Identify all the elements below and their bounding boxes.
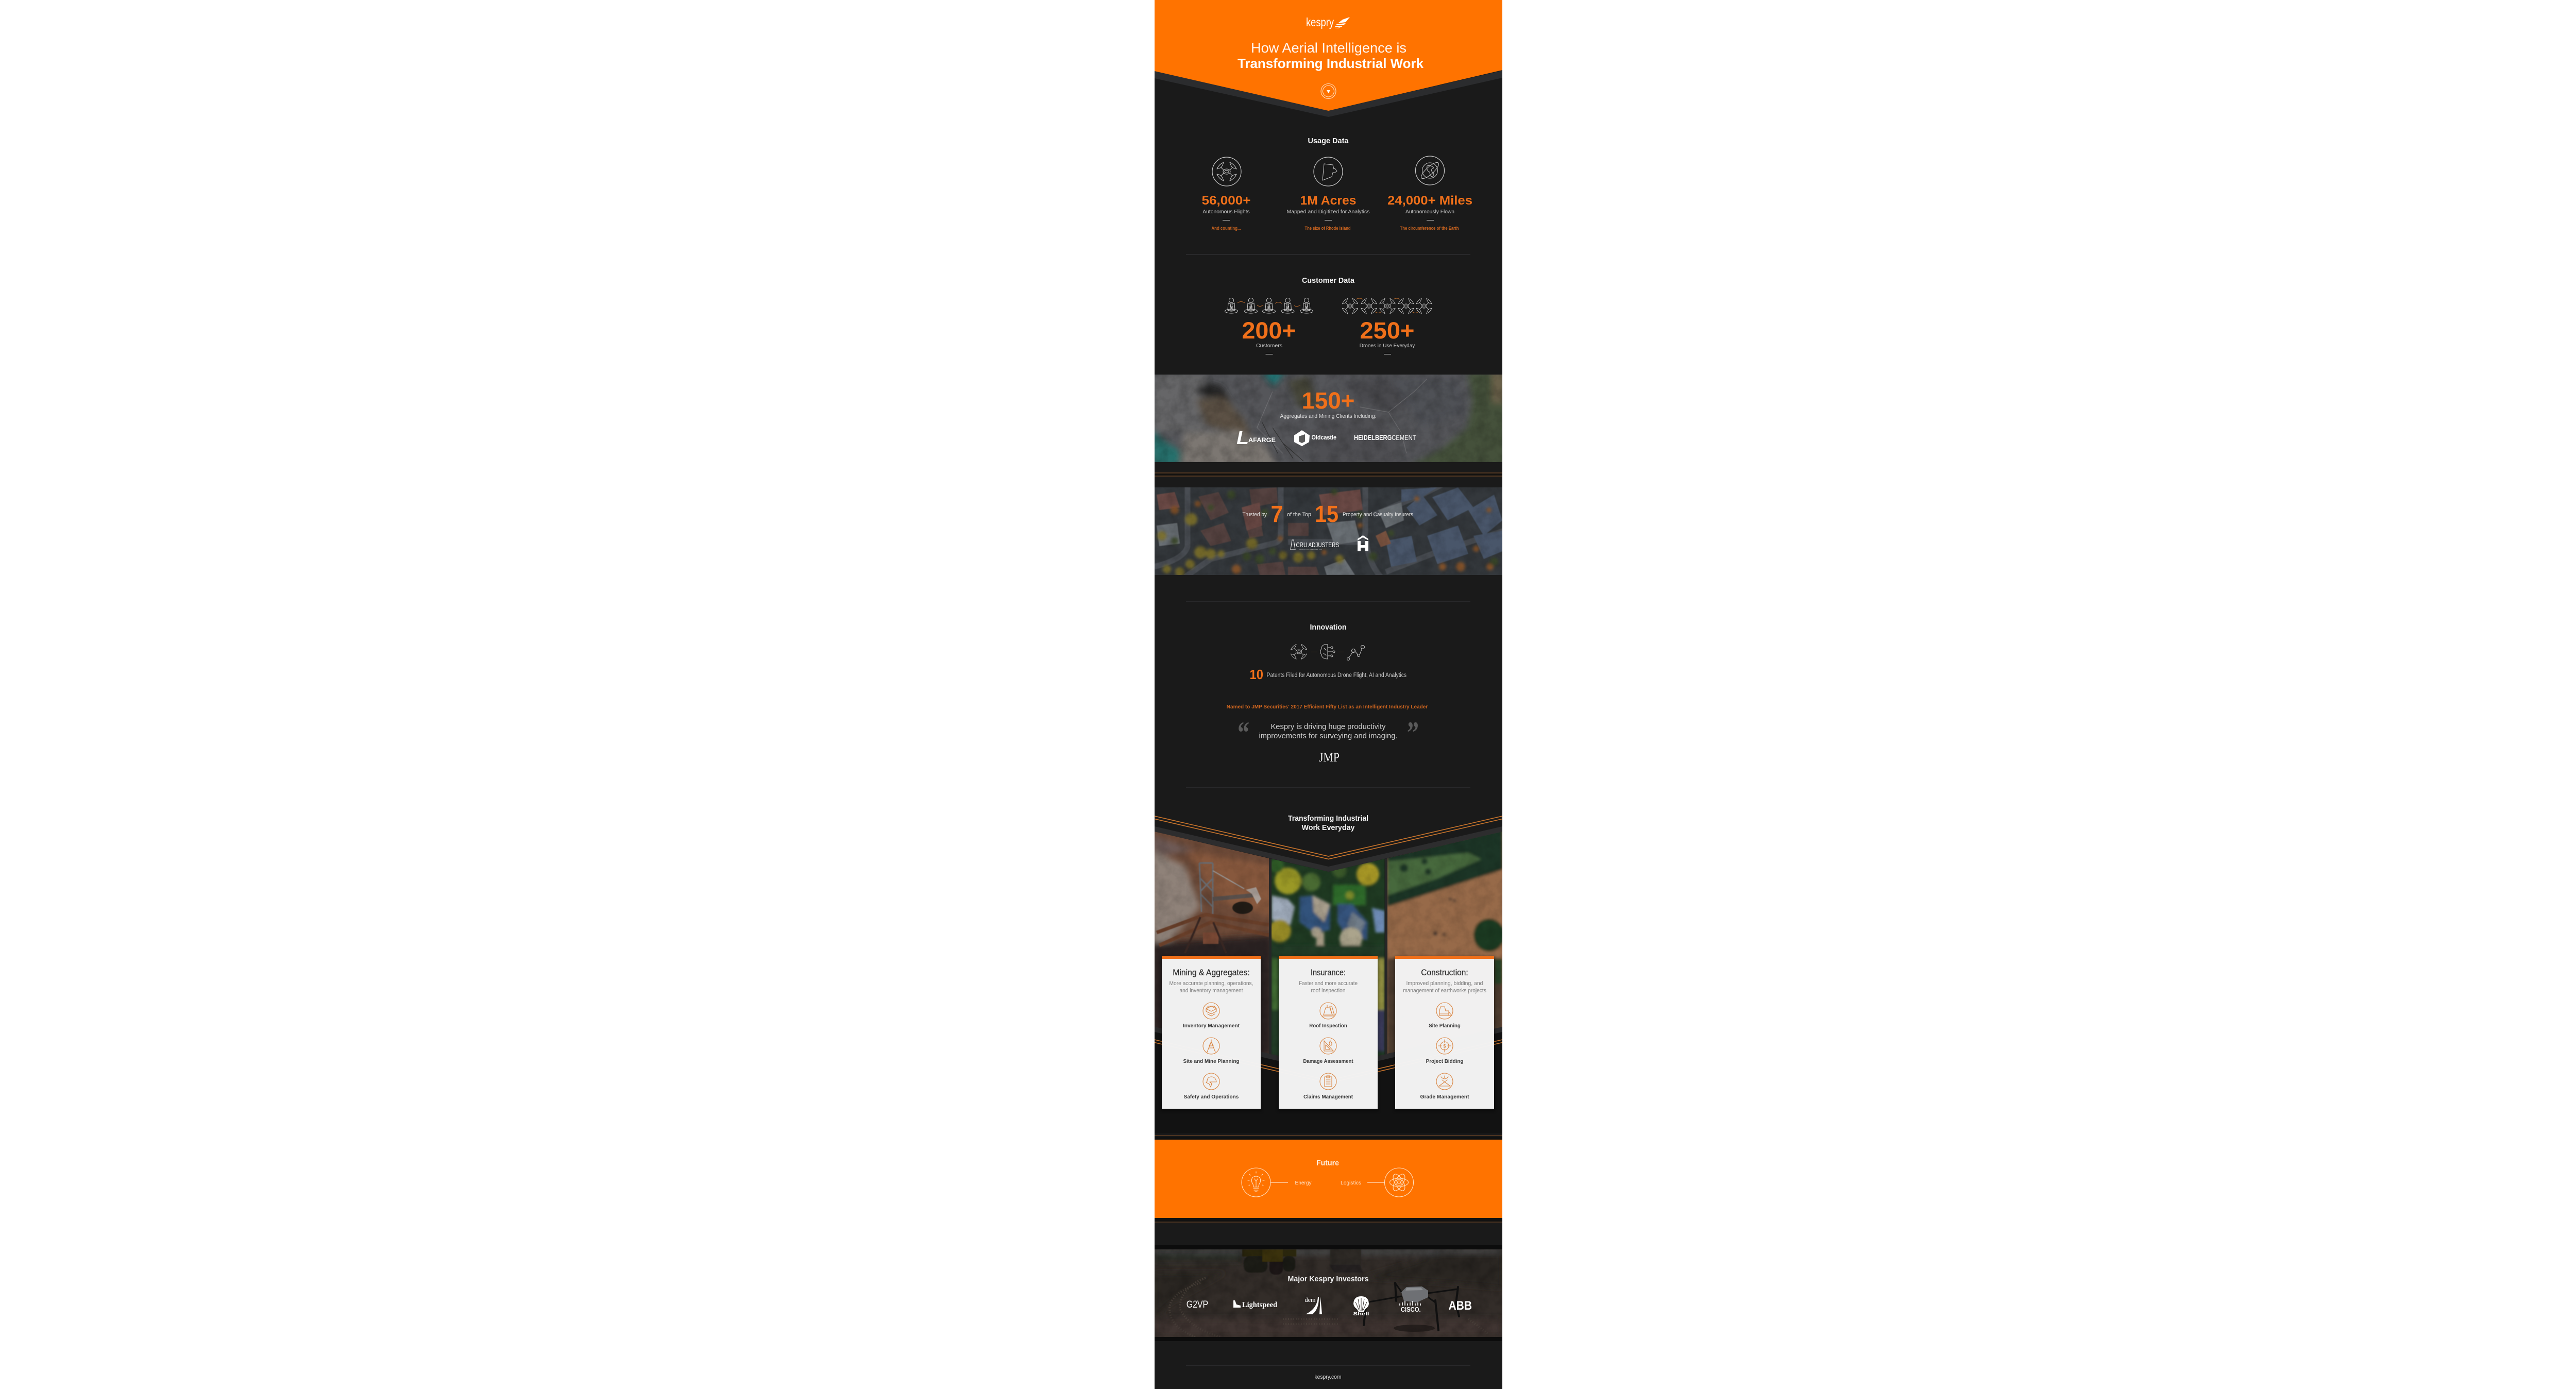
logo: g2vp: G2VP	[1187, 1299, 1208, 1310]
logo: cisco	[1400, 1301, 1421, 1313]
chevron shadow band	[1155, 71, 1502, 117]
heading: Work Everyday	[1301, 823, 1355, 832]
orange header shape	[1155, 0, 1502, 111]
section: innovation	[1227, 623, 1428, 765]
card: construction: Site Planning	[1429, 1023, 1461, 1029]
patents stat: 10	[1250, 667, 1263, 682]
heading: Major Kespry Investors	[1288, 1275, 1368, 1283]
stat: flights: Autonomous Flights	[1202, 209, 1250, 215]
quote: Kespry is driving huge productivity	[1270, 722, 1386, 731]
card: construction: management of earthworks projects	[1403, 988, 1486, 994]
card: insurance: Roof Inspection	[1309, 1023, 1347, 1029]
panel: aggregates and mining	[1155, 375, 1502, 462]
card: mining and aggregates: Site and Mine Planning	[1183, 1058, 1240, 1064]
stat: 150+: 150+	[1301, 387, 1355, 414]
item: energy	[1242, 1168, 1312, 1197]
stat: 200+ customers: 200+	[1242, 317, 1296, 344]
item: logistics	[1341, 1168, 1414, 1197]
photo: construction site	[1387, 829, 1504, 1056]
orange band	[1155, 1140, 1502, 1218]
icons: drone, brain, analytics	[1291, 645, 1364, 660]
stat: miles: 24,000+ Miles	[1387, 194, 1472, 208]
icon: hard hat	[1203, 1073, 1219, 1090]
icon: compass	[1203, 1038, 1219, 1054]
top chevron orange lines	[1155, 816, 1502, 859]
caption: Aggregates and Mining Clients Including:	[1280, 413, 1377, 419]
title: Transforming Industrial Work	[1238, 56, 1424, 71]
logo: cru adjusters: catastrophe response unit	[1299, 548, 1322, 550]
trusted by row	[1243, 501, 1413, 527]
stat: miles: Autonomously Flown	[1405, 209, 1454, 215]
stat: 200+ customers	[1242, 317, 1296, 354]
stat: 250+ drones	[1360, 317, 1415, 354]
page background panel	[1155, 0, 1502, 1389]
stat: miles: The circumference of the Earth	[1400, 226, 1459, 231]
photo: quarry	[1155, 375, 1502, 462]
patents stat: Patents Filed for Autonomous Drone Flight, AI and Analytics	[1266, 672, 1406, 679]
section: customer data	[1225, 276, 1432, 354]
panel: future	[1155, 1136, 1502, 1222]
logo: shell: Shell	[1353, 1311, 1369, 1317]
logo: h house	[1358, 535, 1368, 551]
title: How Aerial Intelligence is	[1251, 40, 1406, 56]
logo: abb: ABB	[1449, 1299, 1472, 1313]
card: insurance: Insurance:	[1311, 968, 1346, 977]
item: energy: Energy	[1295, 1180, 1312, 1186]
stat: flights: And counting...	[1212, 226, 1241, 231]
stat: flights: 56,000+	[1201, 194, 1251, 208]
column gaps	[1269, 858, 1387, 1055]
section: usage data	[1201, 137, 1472, 231]
bottom chevron	[1155, 1027, 1502, 1133]
logo: cisco: CISCO.	[1401, 1306, 1421, 1313]
icon: scroll down	[1321, 83, 1336, 99]
icon: drone	[1212, 157, 1241, 186]
panel: insurers	[1154, 484, 1504, 577]
logo: oldcastle	[1294, 430, 1336, 446]
stat: acres: 1M Acres	[1300, 194, 1356, 208]
heading	[1288, 814, 1368, 832]
stat: miles	[1387, 156, 1472, 231]
icon: roof inspection	[1320, 1003, 1336, 1019]
decorative band edges	[1155, 1136, 1502, 1222]
header banner	[1155, 0, 1502, 117]
icons: customers row	[1225, 298, 1313, 313]
card: mining and aggregates: Inventory Management	[1183, 1023, 1240, 1029]
icon: rhode island	[1314, 157, 1343, 186]
heading: Usage Data	[1308, 137, 1349, 145]
logo: shell	[1353, 1296, 1369, 1317]
heading: Customer Data	[1302, 276, 1355, 285]
card: insurance	[1279, 956, 1378, 1109]
icon: opening quote mark: “	[1238, 716, 1249, 750]
logo: lafarge: AFARGE	[1248, 436, 1276, 444]
card: construction	[1395, 956, 1494, 1109]
card: construction: Project Bidding	[1426, 1058, 1463, 1064]
icon: damage assessment	[1320, 1038, 1336, 1054]
stat: 250+ drones: Drones in Use Everyday	[1360, 343, 1415, 349]
card: mining and aggregates: Safety and Operations	[1184, 1094, 1239, 1100]
heading: Transforming Industrial	[1288, 814, 1368, 823]
card: mining and aggregates: Mining & Aggregates:	[1173, 968, 1250, 977]
top chevron band	[1155, 826, 1502, 872]
card shadows	[1161, 956, 1495, 1111]
stat: 200+ customers: Customers	[1256, 343, 1282, 349]
card: construction: $	[1443, 1044, 1446, 1049]
quote	[1238, 716, 1419, 750]
patents stat	[1250, 667, 1406, 682]
icon: claims clipboard	[1320, 1073, 1336, 1090]
title	[1238, 40, 1424, 71]
quote: improvements for surveying and imaging.	[1259, 732, 1397, 740]
heading: Innovation	[1310, 623, 1347, 632]
icon: inventory	[1203, 1003, 1219, 1019]
card: construction: Construction:	[1421, 968, 1468, 977]
illustration: drone	[1364, 1283, 1459, 1332]
icon: bulldozer	[1436, 1003, 1453, 1019]
stat: flights	[1201, 157, 1251, 231]
logo: cru adjusters: CRU ADJUSTERS	[1296, 541, 1339, 549]
photo: suburb	[1154, 484, 1504, 577]
logo: kespry: kespry	[1306, 15, 1334, 29]
icon: light bulb	[1242, 1168, 1270, 1197]
icons: drones row	[1342, 298, 1432, 314]
heading: Future	[1316, 1159, 1339, 1167]
stat: acres	[1287, 157, 1369, 231]
trusted by row: Trusted by	[1243, 512, 1267, 518]
logo: dfj dem: dem	[1304, 1296, 1316, 1303]
icon: project bidding target	[1436, 1038, 1453, 1054]
logo: lafarge: L	[1236, 427, 1249, 448]
trusted by row: 15	[1315, 501, 1338, 527]
photo: construction ground with drone	[1155, 1249, 1502, 1337]
trusted by row: 7	[1270, 501, 1283, 527]
item: logistics: Logistics	[1341, 1180, 1361, 1186]
icon: grade management	[1436, 1073, 1453, 1090]
card: insurance: Claims Management	[1303, 1094, 1353, 1100]
logo: lafarge	[1236, 427, 1276, 448]
card: construction: Improved planning, bidding, and	[1406, 980, 1483, 987]
photo: mining excavator	[1151, 829, 1273, 1056]
logo: cru adjusters	[1291, 540, 1339, 550]
card: mining and aggregates: More accurate planning, operations,	[1170, 980, 1253, 987]
logo: heidelbergcement: HEIDELBERGCEMENT	[1354, 434, 1416, 442]
logo: dfj dem	[1304, 1296, 1322, 1314]
icon: wing	[1333, 17, 1350, 28]
card: mining and aggregates: and inventory management	[1180, 988, 1243, 994]
card: insurance: Faster and more accurate	[1299, 980, 1358, 987]
card: mining and aggregates	[1162, 956, 1261, 1109]
icon: globe	[1416, 156, 1445, 185]
panel: investors	[1155, 1245, 1502, 1341]
card: construction: Grade Management	[1420, 1094, 1469, 1100]
trusted by row: Property and Casualty Insurers	[1343, 512, 1413, 518]
footer link: kespry.com	[1315, 1374, 1342, 1380]
section: industries	[1151, 814, 1504, 1133]
stat: acres: The size of Rhode Island	[1304, 226, 1351, 231]
card: insurance: Damage Assessment	[1303, 1058, 1353, 1064]
recognition line: Named to JMP Securities' 2017 Efficient Fifty List as an Intelligent Industry Leader	[1227, 704, 1428, 710]
decorative stripes	[1155, 473, 1502, 476]
photo: houses	[1272, 859, 1385, 1056]
trusted by row: of the Top	[1287, 512, 1311, 518]
icon: closing quote mark: ”	[1407, 716, 1419, 750]
logo: jmp: JMP	[1319, 751, 1340, 765]
stat: 250+ drones: 250+	[1360, 317, 1415, 344]
logo: lightspeed: Lightspeed	[1242, 1301, 1278, 1309]
stat: acres: Mapped and Digitized for Analytics	[1287, 209, 1369, 215]
icon: atom	[1385, 1168, 1414, 1197]
logo: oldcastle: Oldcastle	[1312, 434, 1336, 441]
card: insurance: roof inspection	[1311, 988, 1346, 994]
